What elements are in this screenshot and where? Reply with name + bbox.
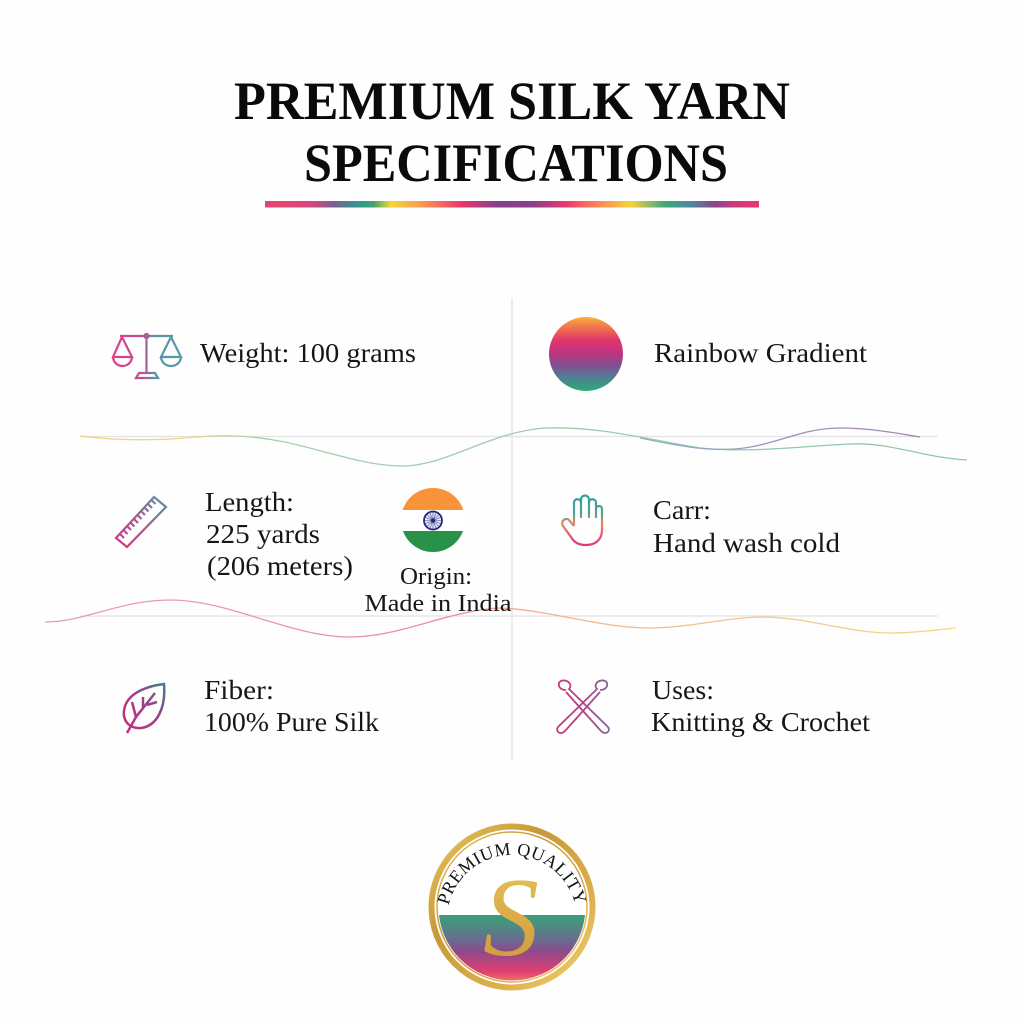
title underline: rainbow bar xyxy=(265,201,759,208)
title: SPECIFICATIONS xyxy=(304,133,728,193)
label: fiber xyxy=(204,675,380,737)
spec: origin xyxy=(364,488,512,617)
spec: uses xyxy=(557,675,871,737)
spec: length xyxy=(116,487,353,581)
badge text: PREMIUM QUALITY xyxy=(437,842,586,905)
premium quality badge xyxy=(428,824,596,990)
icon: leaf xyxy=(124,684,164,733)
spec: weight xyxy=(113,334,416,378)
label: fiber: 100% Pure Silk xyxy=(204,707,380,737)
spec: care xyxy=(562,495,841,558)
label: origin: Made in India xyxy=(364,591,512,617)
label: uses: Knitting & Crochet xyxy=(651,707,871,737)
yarn strand: pink to yellow xyxy=(45,600,956,637)
label: weight: Weight: 100 grams xyxy=(200,338,416,368)
label: colour: Rainbow Gradient xyxy=(654,338,868,368)
label: care xyxy=(653,495,841,558)
icon: crossed needles xyxy=(557,680,609,733)
label: length: Length: xyxy=(205,487,294,517)
icon: rainbow gradient circle xyxy=(549,317,623,391)
label: length: 225 yards xyxy=(206,519,320,549)
icon: India flag xyxy=(400,488,466,553)
label: uses: Uses: xyxy=(652,675,714,705)
label: fiber: Fiber: xyxy=(204,675,274,705)
icon: balance scale xyxy=(113,334,181,378)
spec: fiber xyxy=(124,675,380,737)
yarn strand: blue to purple xyxy=(640,428,920,449)
label: care: Hand wash cold xyxy=(653,528,841,558)
icon: ruler xyxy=(116,497,166,547)
label: length: (206 meters) xyxy=(207,551,353,581)
title xyxy=(234,71,790,193)
title: PREMIUM SILK YARN xyxy=(234,71,790,131)
label: origin: Origin: xyxy=(400,564,472,590)
badge monogram S: S xyxy=(483,856,539,980)
yarn strand: yellow to green xyxy=(80,428,967,466)
badge colour band xyxy=(439,915,585,980)
label: uses xyxy=(651,675,871,737)
label: origin xyxy=(364,564,512,617)
label: length xyxy=(205,487,353,581)
icon: hand xyxy=(562,496,602,545)
spec: colour xyxy=(549,317,868,391)
label: care: Carr: xyxy=(653,495,711,525)
